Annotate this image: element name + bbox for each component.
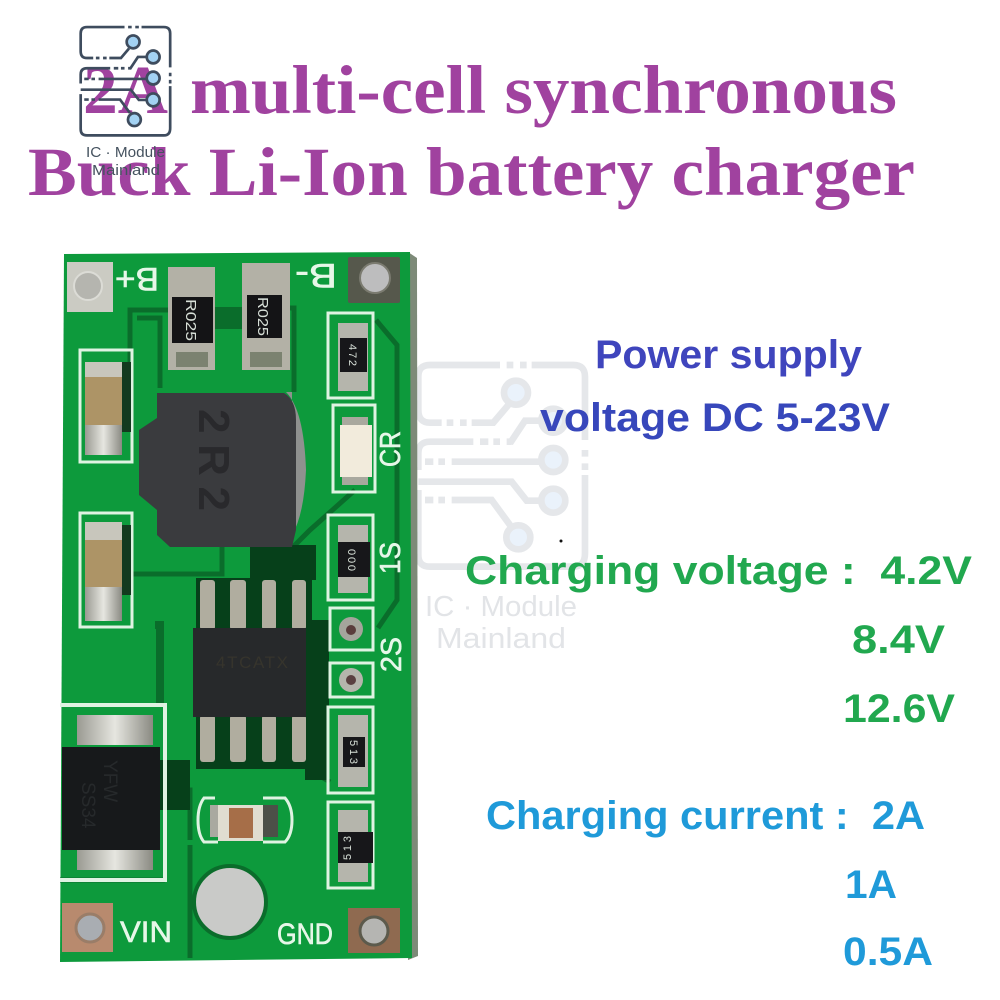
inductor — [139, 392, 306, 547]
spec: power supply voltage: Power supply — [595, 333, 863, 377]
resistor R025 left — [168, 267, 215, 370]
watermark logo — [418, 365, 585, 567]
spec: charging current: 1A — [845, 863, 897, 907]
brand logo: Mainland — [92, 162, 160, 179]
title: multi-cell synchronous — [190, 52, 897, 128]
resistor R025 right: R025 — [254, 297, 271, 336]
resistor 513 lower: 513 — [342, 836, 354, 860]
resistor 472: 472 — [346, 344, 358, 366]
label 2S: 2S — [376, 637, 408, 672]
spec: charging voltage — [465, 549, 972, 731]
title: Buck Li-Ion battery charger — [28, 134, 915, 210]
spec: power supply voltage: voltage DC 5-23V — [540, 396, 890, 440]
mounting hole — [194, 866, 266, 938]
PCB board — [60, 252, 418, 962]
bottom-left VIN pad — [62, 903, 113, 952]
small capacitor — [198, 798, 292, 842]
label B+: B+ — [115, 261, 159, 297]
dark copper shadow around chip — [155, 545, 329, 810]
spec: charging voltage: 12.6V — [843, 687, 955, 731]
brand logo: IC · Module — [86, 144, 165, 161]
IC chip — [193, 580, 306, 762]
stray dot — [560, 540, 562, 542]
brand logo — [81, 27, 170, 179]
inductor: 2R2 — [189, 409, 238, 511]
jumper pad 2 — [330, 663, 373, 697]
capacitor top — [80, 350, 132, 462]
label CR: CR — [375, 431, 407, 467]
spec: charging current: Charging current : 2A — [486, 794, 925, 838]
resistor 513 upper: 513 — [347, 740, 359, 764]
resistor R025 right — [242, 263, 290, 370]
label 1S: 1S — [375, 542, 407, 574]
jumper pad 1 — [330, 608, 373, 650]
bottom-right GND pad — [348, 908, 400, 953]
label GND: GND — [277, 918, 333, 951]
title: 2A — [83, 52, 168, 128]
spec: charging current — [486, 794, 933, 974]
LED — [333, 405, 375, 492]
board edge — [408, 252, 418, 960]
capacitor middle — [80, 513, 132, 627]
watermark brand text: Mainland — [436, 623, 566, 655]
resistor 513 upper — [328, 707, 373, 793]
diode SS34: SS34 — [77, 782, 98, 829]
silk: top-left pad — [67, 262, 113, 312]
copper traces — [60, 308, 397, 958]
watermark brand text: IC · Module — [425, 591, 577, 623]
diode SS34: YFW — [99, 760, 120, 802]
watermark brand text — [425, 591, 577, 655]
spec: charging voltage: Charging voltage : 4.2V — [465, 549, 972, 593]
spec: power supply voltage — [540, 333, 890, 440]
label B-: B- — [295, 256, 337, 294]
IC chip: 4TCATX — [216, 653, 288, 672]
resistor 513 lower — [328, 802, 373, 888]
resistor 000: 000 — [345, 549, 357, 571]
diode SS34 — [60, 705, 165, 880]
resistor 000 — [328, 515, 373, 600]
board base — [60, 252, 412, 962]
spec: charging current: 0.5A — [843, 930, 933, 974]
resistor 472 — [328, 313, 373, 398]
label VIN: VIN — [120, 916, 172, 949]
spec: charging voltage: 8.4V — [852, 618, 945, 662]
resistor R025 left: R025 — [182, 299, 199, 341]
silk: top-right pad — [348, 257, 400, 303]
title — [28, 52, 915, 210]
